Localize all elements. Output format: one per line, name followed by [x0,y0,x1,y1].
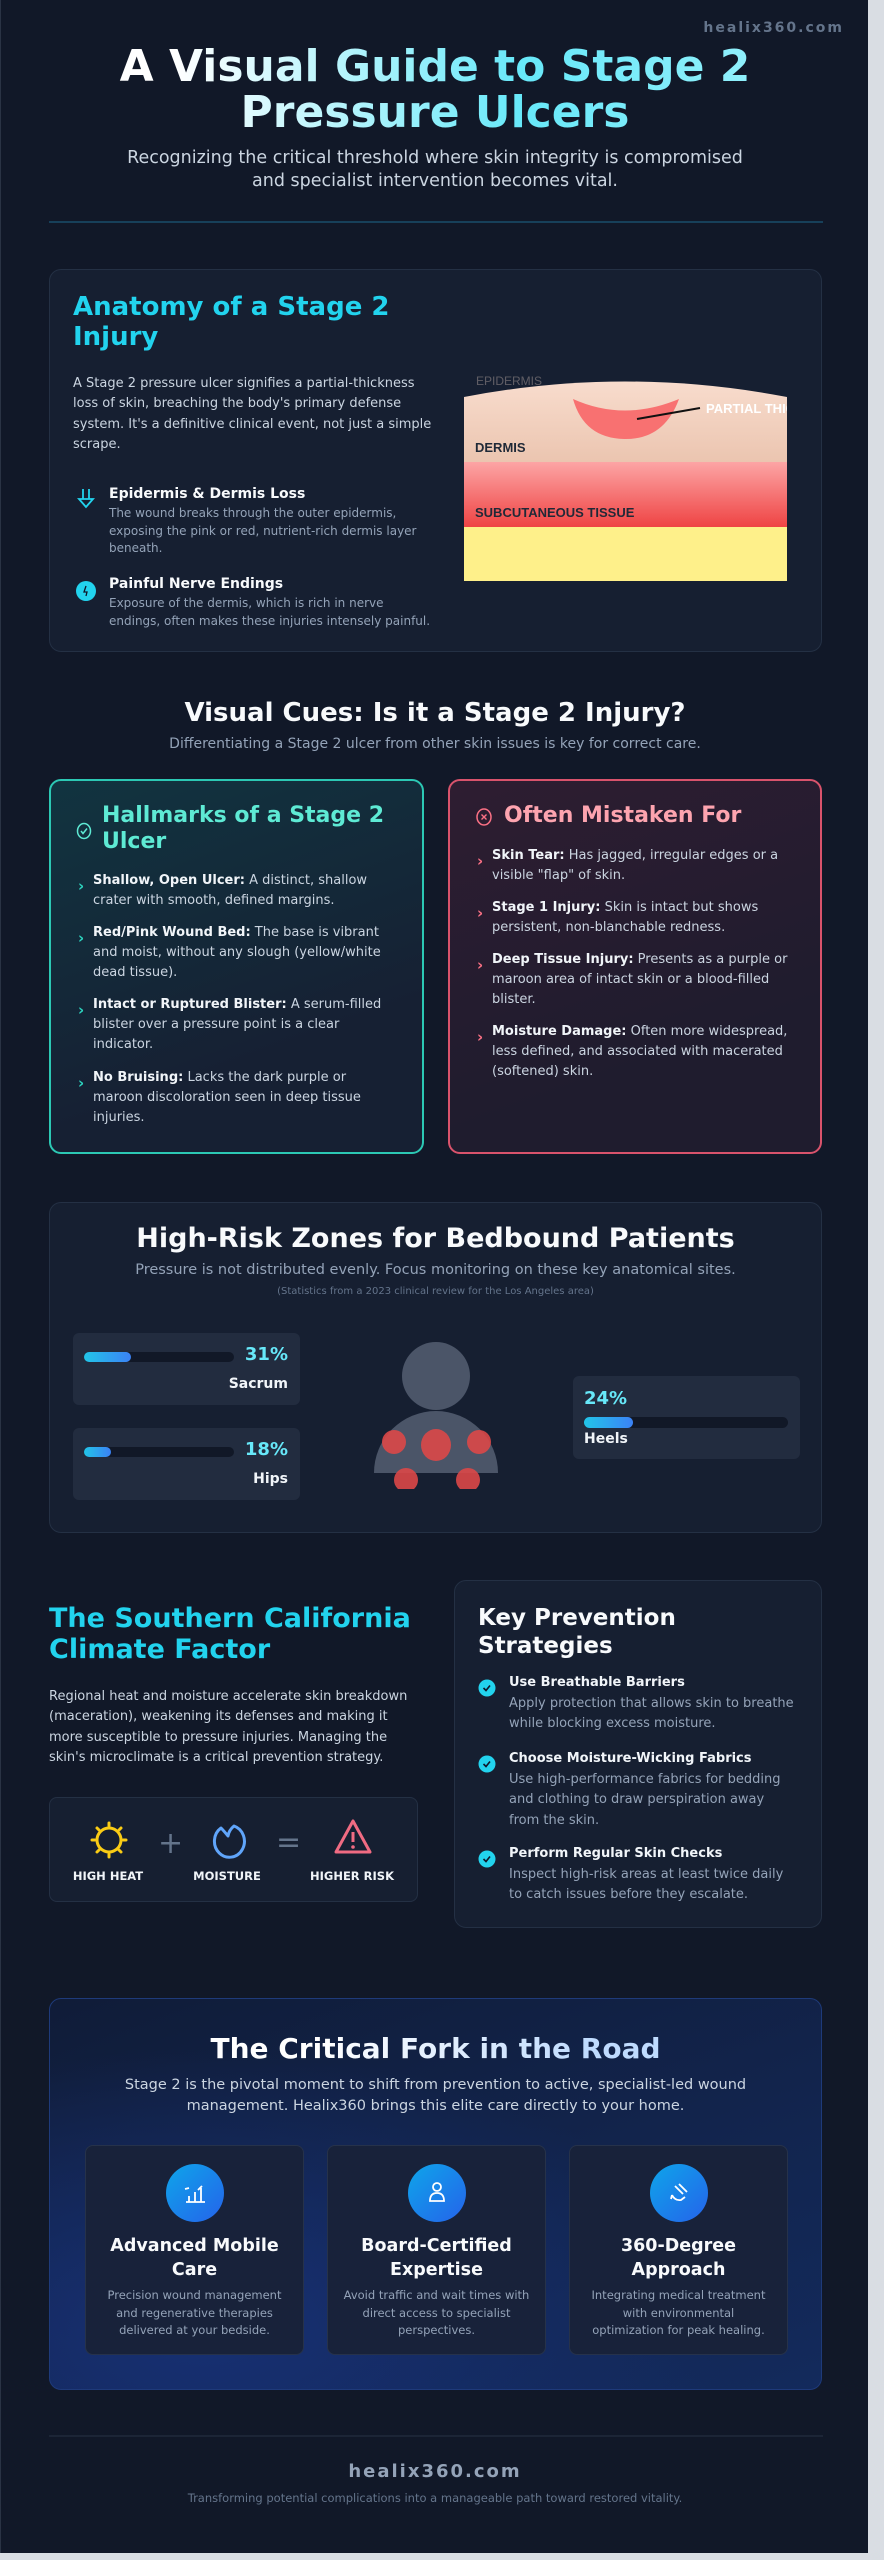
heading: anatomy: Injury [73,322,158,352]
icon: nerve [76,581,96,601]
heading: climate factor [49,1603,411,1665]
card: board-certified [327,2145,546,2355]
footer tagline: Transforming potential complications into a manageable path toward restored vitality. [188,2491,682,2505]
card: board-certified: Avoid traffic and wait times with direct access to specialist perspectives. [344,2288,529,2337]
item: breathable barriers: Use Breathable Barriers [509,1675,685,1690]
card: board-certified: Board-Certified [361,2236,512,2256]
list: hallmarks: No Bruising: Lacks the dark purple or maroon discoloration seen in deep tissue injuries. [93,1070,361,1125]
note: statistics source: (Statistics from a 2023 clinical review for the Los Angeles area) [277,1286,594,1297]
heading: anatomy: Anatomy of a Stage 2 [73,292,389,322]
list: hallmarks: Red/Pink Wound Bed: The base is vibrant and moist, without any slough (yellow/white dead tissue). [93,925,381,980]
labels: equation: HIGH HEAT [73,1869,143,1883]
list: hallmarks: › [78,1074,84,1092]
stat: sacrum: Sacrum [229,1376,288,1392]
card: 360-degree [569,2145,788,2355]
card: mobile care: Precision wound management and regenerative therapies delivered at your bedside. [108,2288,281,2337]
heading: key prevention [478,1605,676,1659]
heading: hallmarks: Ulcer [102,829,166,854]
list: hallmarks: › [78,1001,84,1019]
list: mistaken: › [477,904,483,922]
panel: anatomy [49,269,822,652]
equation: heat + moisture = risk [49,1797,418,1902]
icon: sun [90,1822,128,1858]
heading: climate factor: Climate Factor [49,1634,270,1665]
heading: key prevention: Key Prevention [478,1605,676,1631]
chart: skin layers diagram: DERMIS [475,440,526,455]
brand tag: healix360.com [703,20,844,36]
item: nerve endings [76,576,430,628]
item: epidermis loss: The wound breaks through the outer epidermis, exposing the pink or red, nutrient-rich dermis layer beneath. [109,506,416,555]
item: skin checks [478,1846,783,1902]
text: anatomy intro: A Stage 2 pressure ulcer signifies a partial-thickness loss of skin, breaching the body's primary defense system. It's a definitive clinical event, not just a simple scrape. [73,376,431,452]
panel: key prevention [454,1580,822,1928]
item: epidermis loss: Epidermis & Dermis Loss [109,486,305,502]
title [1,44,869,136]
card: 360-degree: 360-Degree [621,2236,736,2256]
list: mistaken: Deep Tissue Injury: Presents as a purple or maroon area of intact skin or a blood-filled blister. [492,952,787,1007]
card: 360-degree: Integrating medical treatment [592,2288,765,2302]
heading: hallmarks: Hallmarks of a Stage 2 [102,803,384,828]
list: mistaken: Stage 1 Injury: Skin is intact but shows persistent, non-blanchable redness. [492,900,758,935]
chart: skin layers diagram [464,376,787,581]
heading: climate factor: The Southern California [49,1603,411,1634]
chart: skin layers diagram: EPIDERMIS [476,374,542,388]
stat: sacrum: 31% [245,1344,288,1365]
item: wicking fabrics: Use high-performance fabrics for bedding and clothing to draw perspiration away from the skin. [509,1772,781,1828]
list: hallmarks: Shallow, Open Ulcer: A distinct, shallow crater with smooth, defined margins. [93,873,367,908]
labels: equation: HIGHER RISK [310,1869,394,1883]
list: hallmarks: › [78,877,84,895]
heading: hallmarks [102,803,384,854]
item: nerve endings: Exposure of the dermis, which is rich in nerve [109,596,384,610]
footer brand: healix360.com [348,2461,522,2482]
stat: sacrum [73,1333,300,1405]
list: mistaken: Skin Tear: Has jagged, irregular edges or a visible "flap" of skin. [492,848,778,883]
heading: anatomy [73,292,389,352]
card: mobile care [85,2145,304,2355]
icon: down arrow [77,489,95,508]
stat: heels [573,1376,800,1459]
list: mistaken: › [477,1028,483,1046]
icon: plus: + [158,1826,183,1861]
title: A Visual Guide to Stage 2 [120,41,750,92]
text: climate: Regional heat and moisture accelerate skin breakdown (maceration), weakening its defenses and making it more susceptible to pressure injuries. Managing the skin's microclimate is a critical prevention strategy. [49,1689,407,1765]
card: mobile care: Care [172,2260,217,2280]
heading: high-risk: High-Risk Zones for Bedbound Patients [136,1223,735,1254]
card: 360-degree: optimization for peak healing. [592,2323,765,2337]
list: mistaken: › [477,852,483,870]
icon: check circle [76,822,92,840]
list: mistaken: Moisture Damage: Often more widespread, less defined, and associated with macerated (softened) skin. [492,1024,787,1079]
list: hallmarks: Intact or Ruptured Blister: A serum-filled blister over a pressure point is a clear indicator. [93,997,381,1052]
heading: visual cues: Visual Cues: Is it a Stage 2 Injury? [184,698,686,728]
list: mistaken: › [477,956,483,974]
stat: heels: 24% [584,1388,627,1409]
subtitle: Recognizing the critical threshold where skin integrity is compromised [127,148,743,168]
card: 360-degree: with environmental [623,2306,734,2320]
item: wicking fabrics: Choose Moisture-Wicking Fabrics [509,1751,752,1766]
panel: high-risk zones [49,1202,822,1533]
chart: skin layers diagram: SUBCUTANEOUS TISSUE [475,505,635,520]
heading: critical fork: The Critical Fork in the Road [210,2032,661,2065]
panel: often mistaken [448,779,822,1154]
stat: hips: Hips [253,1471,288,1487]
heading: critical fork [50,2033,821,2065]
heading: mistaken: Often Mistaken For [504,803,741,828]
panel: hallmarks [49,779,424,1154]
item: epidermis loss [77,486,416,555]
card: mobile care: Advanced Mobile [110,2236,279,2256]
stat: hips [73,1428,300,1500]
title: Pressure Ulcers [240,87,629,138]
item: nerve endings: endings, often makes these injuries intensely painful. [109,614,430,628]
item: skin checks: Perform Regular Skin Checks [509,1846,722,1861]
list: hallmarks [78,873,381,1125]
icon: x circle [476,808,492,826]
text: critical fork intro: Stage 2 is the pivotal moment to shift from prevention to active, specialist-led wound management. Healix360 brings this elite care directly to your home. [125,2077,746,2114]
subtitle: high-risk: Pressure is not distributed evenly. Focus monitoring on these key anatomical sites. [135,1262,736,1278]
item: skin checks: Inspect high-risk areas at least twice daily to catch issues before they escalate. [509,1867,783,1902]
icon: moisture [212,1824,246,1859]
icon: equals: = [276,1825,301,1860]
labels: equation: MOISTURE [193,1869,261,1883]
subtitle [127,148,743,191]
item: breathable barriers: Apply protection that allows skin to breathe while blocking excess moisture. [509,1696,794,1731]
icon: warning [334,1819,372,1854]
stat: heels: Heels [584,1431,628,1447]
panel: critical fork [49,1998,822,2390]
item: nerve endings: Painful Nerve Endings [109,576,283,592]
card: board-certified: Expertise [390,2260,483,2280]
item: breathable barriers [478,1675,794,1731]
heading: key prevention: Strategies [478,1633,613,1659]
subtitle: and specialist intervention becomes vital. [252,171,618,191]
card: 360-degree: Approach [632,2260,725,2280]
list: mistaken [477,848,788,1079]
subtitle: visual cues: Differentiating a Stage 2 ulcer from other skin issues is key for correct care. [169,736,701,752]
icon: body figure with pressure points [374,1342,498,1489]
list: hallmarks: › [78,929,84,947]
item: wicking fabrics [478,1751,781,1828]
labels: equation [73,1869,394,1883]
stat: hips: 18% [245,1439,288,1460]
